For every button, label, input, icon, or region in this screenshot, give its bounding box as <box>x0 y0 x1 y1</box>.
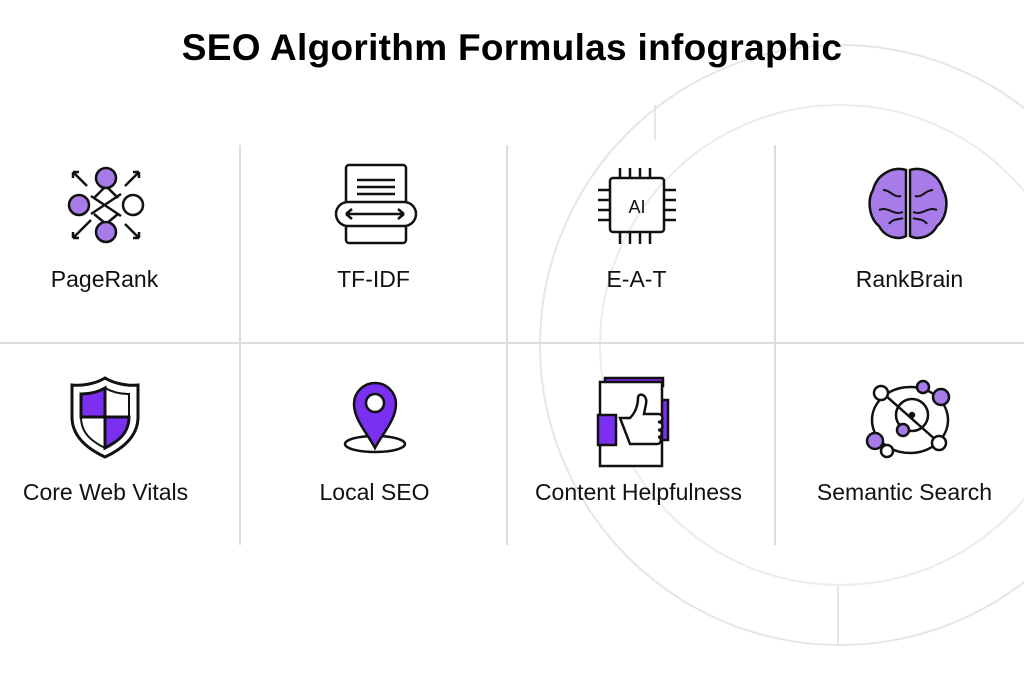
label: rankbrain: RankBrain <box>856 266 963 292</box>
icon: pagerank <box>68 166 144 244</box>
title: SEO Algorithm Formulas infographic <box>182 27 842 68</box>
label: local SEO: Local SEO <box>320 479 429 505</box>
label: tf-idf: TF-IDF <box>337 266 410 292</box>
icon: brain <box>868 168 948 240</box>
label: content helpfulness: Content Helpfulness <box>535 479 742 505</box>
icon: map pin <box>344 382 406 454</box>
label: core web vitals: Core Web Vitals <box>23 479 188 505</box>
icon: thumbs up doc <box>596 376 670 468</box>
label: pagerank: PageRank <box>51 266 158 292</box>
icon: semantic search <box>866 380 950 458</box>
label: semantic search: Semantic Search <box>817 479 992 505</box>
icon: shield <box>70 376 140 459</box>
icon: tf-idf <box>334 164 418 244</box>
icon: E-A-T chip: AI <box>628 197 646 217</box>
label: E-A-T: E-A-T <box>606 266 667 292</box>
icon: E-A-T chip <box>598 168 676 244</box>
